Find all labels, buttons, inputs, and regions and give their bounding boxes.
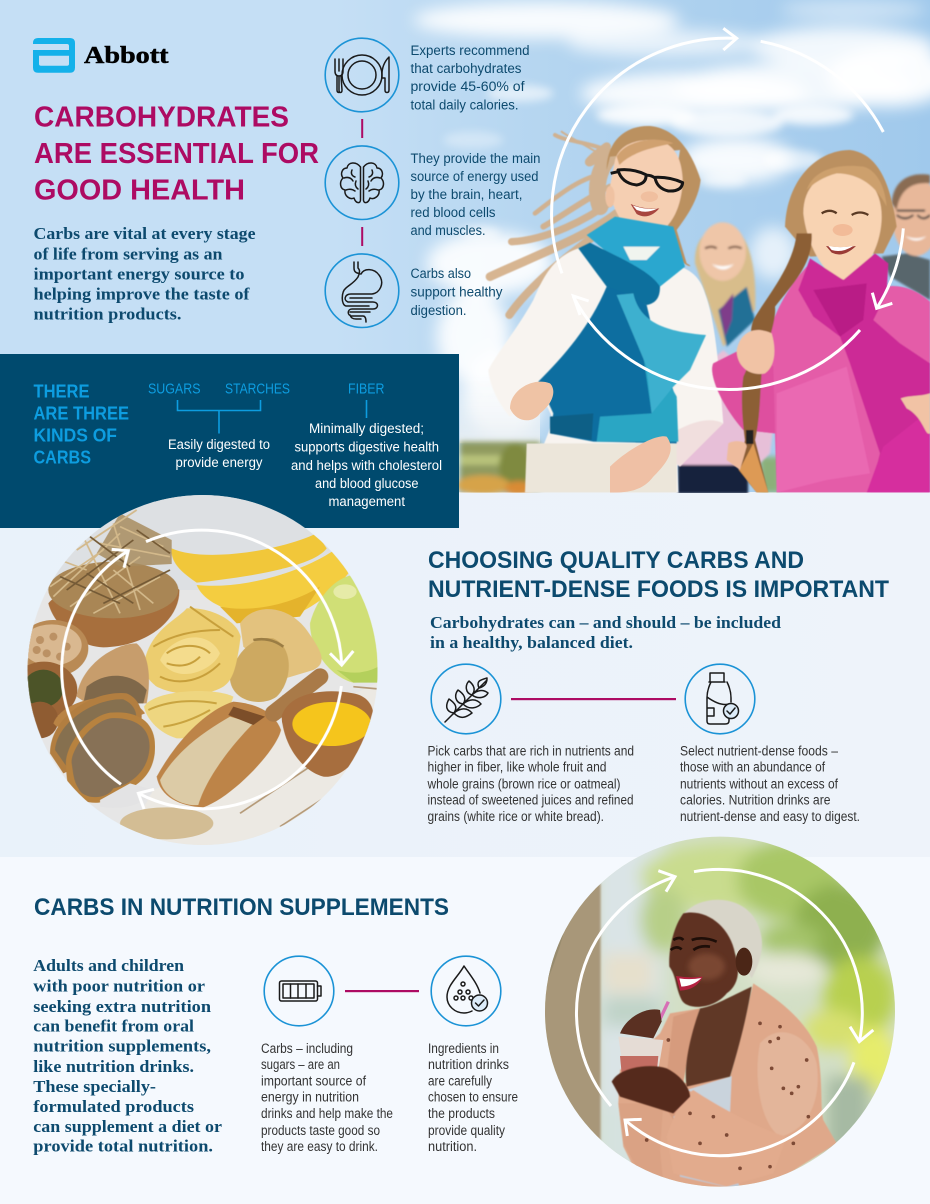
- heading: nutrition supplements: CARBS IN NUTRITION SUPPLEMENTS: [34, 894, 449, 921]
- background: food section: [0, 492, 930, 857]
- intro paragraph: important energy source to: [34, 264, 244, 284]
- body text: quality ingredients: the products: [428, 1106, 495, 1121]
- ring of arrows: [62, 530, 353, 809]
- body text: sugars in drinks: sugars – are an: [261, 1057, 340, 1072]
- fiber description: and blood glucose: [315, 476, 418, 491]
- body text: pick carbs: higher in fiber, like whole fruit and: [428, 760, 606, 775]
- benefit text: digestion: Carbs also: [410, 266, 471, 281]
- intro paragraph: [34, 224, 256, 324]
- hands: [620, 1009, 662, 1038]
- icon: water drop with check: [431, 956, 501, 1026]
- chickpea and lentil bowls: [28, 620, 89, 738]
- green apple: [310, 575, 378, 683]
- logo: Abbott: Abbott: [84, 43, 169, 69]
- sugars and starches description: Easily digested to: [168, 437, 270, 452]
- pink top: [712, 267, 930, 493]
- panel heading: THERE: [34, 382, 90, 402]
- body text: quality ingredients: Ingredients in: [428, 1041, 499, 1056]
- benefit text: daily calories: [410, 43, 530, 112]
- teal scarf: [538, 217, 706, 443]
- connector: [345, 990, 419, 992]
- body text: nutrient-dense foods: nutrients without an excess of: [680, 776, 838, 791]
- ring of arrows: [552, 28, 903, 389]
- cornmeal bowl: [282, 691, 374, 777]
- panel: kinds of carbs: [0, 354, 459, 528]
- heading: quality carbs: CHOOSING QUALITY CARBS AND: [428, 547, 804, 574]
- woman in the back: [673, 222, 777, 493]
- body text: pick carbs: Pick carbs that are rich in nutrients and: [428, 743, 634, 758]
- body text: sugars in drinks: drinks and help make the: [261, 1106, 393, 1121]
- man in the back: [882, 174, 930, 300]
- body text: sugars in drinks: Carbs – including: [261, 1041, 353, 1056]
- fists: [510, 382, 553, 420]
- cardigan: [618, 983, 837, 1190]
- body text: sugars in drinks: they are easy to drink.: [261, 1139, 378, 1154]
- body text: pick carbs: [427, 743, 634, 824]
- body text: quality ingredients: nutrition drinks: [428, 1057, 509, 1072]
- carb type labels: SUGARS: [148, 382, 200, 398]
- benefit text: energy source: They provide the main: [410, 151, 540, 166]
- logo: Abbott: [33, 38, 169, 73]
- body text: quality ingredients: are carefully: [428, 1074, 492, 1089]
- intro paragraph: Carbs are vital at every stage: [34, 224, 256, 243]
- body text: quality ingredients: chosen to ensure: [428, 1090, 518, 1105]
- paragraph: oral nutrition supplements: can supplement a diet or: [33, 1117, 222, 1136]
- body text: sugars in drinks: important source of: [261, 1074, 366, 1089]
- landscape: [457, 442, 780, 496]
- braid: [738, 233, 812, 493]
- icon: brain: [325, 146, 399, 220]
- benefit text: energy source: by the brain, heart,: [410, 187, 522, 202]
- title: CARBOHYDRATES: [34, 102, 289, 134]
- body text: nutrient-dense foods: calories. Nutrition drinks are: [680, 793, 830, 808]
- panel heading: [34, 382, 129, 468]
- title: ARE ESSENTIAL FOR: [34, 138, 319, 170]
- benefit text: daily calories: Experts recommend: [410, 43, 530, 58]
- subheading: [430, 613, 781, 652]
- bracket connectors: [178, 400, 366, 434]
- connector: [511, 698, 676, 700]
- background: sky panel: [0, 0, 930, 494]
- white long sleeve shirt: [488, 247, 723, 493]
- icon: battery: [264, 956, 334, 1026]
- paragraph: oral nutrition supplements: provide total nutrition.: [33, 1137, 213, 1156]
- body text: sugars in drinks: [261, 1041, 393, 1154]
- body text: pick carbs: instead of sweetened juices and refined: [428, 793, 634, 808]
- intro paragraph: nutrition products.: [34, 304, 182, 324]
- paragraph: oral nutrition supplements: [33, 956, 222, 1156]
- neck and chest: [686, 987, 752, 1087]
- icon: nutrition bottle: [685, 664, 755, 734]
- benefit text: energy source: and muscles.: [410, 223, 486, 238]
- carb type labels: STARCHES: [225, 382, 290, 398]
- body text: quality ingredients: provide quality: [428, 1123, 505, 1138]
- body text: nutrient-dense foods: those with an abundance of: [680, 760, 825, 775]
- icon: stomach and intestines: [325, 254, 399, 328]
- panel heading: KINDS OF: [34, 426, 117, 446]
- fiber description: supports digestive health: [294, 440, 439, 455]
- fiber description: and helps with cholesterol: [291, 458, 442, 473]
- body text: pick carbs: grains (white rice or white bread).: [428, 809, 604, 824]
- body text: quality ingredients: [428, 1041, 518, 1154]
- heading: quality carbs: [428, 547, 889, 603]
- paragraph: oral nutrition supplements: can benefit from oral: [33, 1017, 194, 1036]
- body text: pick carbs: whole grains (brown rice or oatmeal): [427, 776, 620, 791]
- benefit text: daily calories: total daily calories.: [410, 98, 518, 112]
- benefit text: digestion: support healthy: [410, 284, 503, 300]
- fiber description: Minimally digested;: [309, 421, 424, 436]
- tagliatelle nests: [144, 607, 241, 738]
- drink cup: [618, 1002, 668, 1073]
- body text: sugars in drinks: products taste good so: [261, 1123, 380, 1138]
- benefit text: digestion: [410, 266, 503, 318]
- benefit text: daily calories: provide 45-60% of: [410, 79, 525, 94]
- heading: quality carbs: NUTRIENT-DENSE FOODS IS IMPORTANT: [428, 576, 889, 603]
- hair: [682, 900, 762, 978]
- paragraph: oral nutrition supplements: nutrition supplements,: [33, 1037, 211, 1056]
- benefit text: daily calories: that carbohydrates: [410, 61, 522, 76]
- subheading: Carbohydrates can – and should – be included: [430, 613, 781, 632]
- paragraph: oral nutrition supplements: Adults and children: [33, 956, 184, 975]
- fiber description: [291, 421, 442, 509]
- paragraph: oral nutrition supplements: seeking extra nutrition: [33, 997, 211, 1016]
- sugars and starches description: [168, 437, 270, 470]
- hands: [737, 330, 774, 374]
- face: [669, 913, 738, 1007]
- photo: smiling woman with a drink in a circle: [540, 830, 900, 1190]
- title: GOOD HEALTH: [34, 174, 245, 206]
- benefit text: energy source: source of energy used: [410, 169, 538, 184]
- paragraph: oral nutrition supplements: like nutrition drinks.: [33, 1057, 194, 1076]
- benefit text: energy source: [410, 151, 540, 238]
- connector: [361, 227, 363, 246]
- title: [34, 102, 319, 206]
- photo: family running under a cloudy sky: [413, 1, 930, 496]
- panel heading: CARBS: [34, 448, 91, 468]
- benefit text: energy source: red blood cells: [410, 205, 496, 220]
- intro paragraph: of life from serving as an: [34, 244, 222, 264]
- body text: nutrient-dense foods: nutrient-dense and easy to digest.: [680, 809, 860, 824]
- paragraph: oral nutrition supplements: with poor nutrition or: [33, 977, 205, 996]
- body text: sugars in drinks: energy in nutrition: [261, 1090, 359, 1105]
- girl with glasses: [488, 126, 723, 493]
- paragraph: oral nutrition supplements: These specially-: [33, 1077, 156, 1096]
- fibre bowl: [48, 510, 179, 647]
- subheading: in a healthy, balanced diet.: [430, 633, 633, 652]
- banana pair: [172, 533, 348, 623]
- body text: nutrient-dense foods: Select nutrient-dense foods –: [680, 743, 838, 758]
- girl with pink scarf: [712, 150, 930, 493]
- potatoes: [230, 609, 322, 702]
- paragraph: oral nutrition supplements: formulated products: [33, 1097, 195, 1116]
- face details: [611, 170, 683, 216]
- icon: plate and cutlery: [325, 38, 399, 112]
- magenta scarf: [798, 253, 930, 460]
- carb type labels: FIBER: [348, 382, 384, 398]
- intro paragraph: helping improve the taste of: [34, 284, 250, 304]
- body text: nutrient-dense foods: [680, 743, 860, 824]
- benefit text: digestion: digestion.: [410, 303, 466, 318]
- ring of arrows: [577, 869, 873, 1156]
- rice scoop: [120, 677, 320, 839]
- bread: [50, 643, 155, 808]
- panel heading: ARE THREE: [34, 404, 129, 424]
- body text: quality ingredients: nutrition.: [428, 1139, 477, 1154]
- background: supplements section: [0, 857, 930, 1204]
- photo: carbohydrate foods in a circle: [28, 495, 378, 845]
- carb type labels: [148, 382, 384, 398]
- sugars and starches description: provide energy: [176, 455, 263, 470]
- connector: [361, 119, 363, 138]
- fiber description: management: [328, 494, 405, 509]
- icon: wheat: [431, 664, 501, 734]
